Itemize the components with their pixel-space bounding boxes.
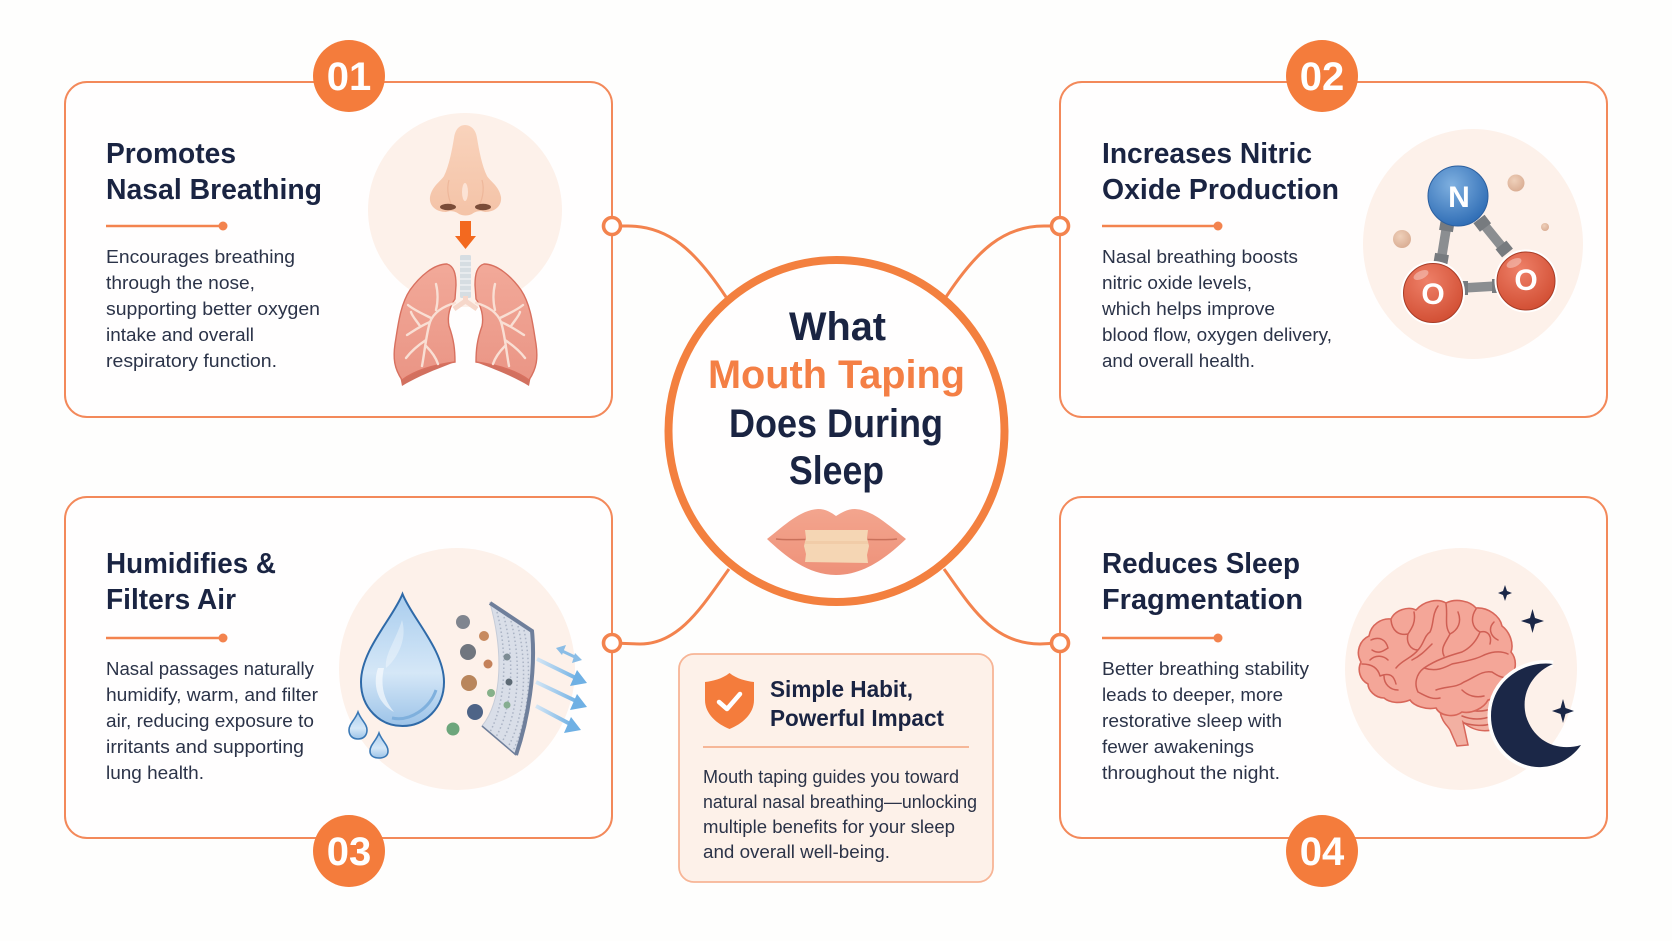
nose bbox=[430, 125, 501, 216]
callout: simple habit, powerful impact bbox=[679, 654, 993, 882]
heading bbox=[106, 548, 276, 616]
callout heading bbox=[770, 676, 944, 731]
atom O right: O bbox=[1514, 264, 1538, 297]
arrow down bbox=[455, 221, 476, 249]
particles bbox=[446, 615, 495, 736]
body text: blood flow, oxygen delivery, bbox=[1102, 324, 1332, 345]
body text: throughout the night. bbox=[1102, 762, 1280, 783]
body text: through the nose, bbox=[106, 272, 255, 293]
body text: fewer awakenings bbox=[1102, 736, 1254, 757]
title: Sleep bbox=[789, 449, 884, 493]
lungs bbox=[394, 264, 537, 386]
icon: molecule bbox=[1363, 129, 1583, 359]
divider bbox=[1102, 634, 1222, 642]
badge 04: 04 bbox=[1300, 830, 1345, 874]
airflow arrows bbox=[536, 645, 587, 733]
body text: Encourages breathing bbox=[106, 246, 295, 267]
callout body: natural nasal breathing—unlocking bbox=[703, 792, 977, 812]
badge 03: 03 bbox=[327, 830, 371, 874]
heading: Increases Nitric bbox=[1102, 138, 1312, 170]
heading bbox=[1102, 138, 1339, 206]
heading bbox=[106, 138, 322, 206]
badge 01: 01 bbox=[327, 55, 371, 99]
atom N: N bbox=[1448, 181, 1470, 214]
body text bbox=[106, 658, 318, 783]
icon: water drop and air filter bbox=[339, 548, 587, 790]
tape bbox=[804, 530, 869, 563]
body text: and overall health. bbox=[1102, 350, 1255, 371]
heading: Reduces Sleep bbox=[1102, 548, 1300, 580]
heading: Fragmentation bbox=[1102, 584, 1303, 616]
icon: taped lips bbox=[767, 509, 906, 575]
badge 02: 02 bbox=[1300, 55, 1344, 99]
heading: Humidifies & bbox=[106, 548, 276, 580]
filter mesh bbox=[482, 603, 533, 755]
panel: 03 humidifies and filters bbox=[65, 497, 612, 887]
callout body: multiple benefits for your sleep bbox=[703, 817, 955, 837]
heading: Promotes bbox=[106, 138, 236, 170]
body text: irritants and supporting bbox=[106, 736, 304, 757]
heading: Nasal Breathing bbox=[106, 174, 322, 206]
panel: 02 nitric oxide bbox=[1060, 40, 1607, 417]
title: What bbox=[789, 305, 886, 349]
body text bbox=[106, 246, 320, 371]
callout heading: Powerful Impact bbox=[770, 705, 944, 731]
crescent moon bbox=[1491, 663, 1581, 767]
badge 04 bbox=[1286, 815, 1358, 887]
panel: 01 promotes nasal breathing bbox=[65, 40, 612, 417]
callout body: and overall well-being. bbox=[703, 842, 890, 862]
panel: 04 reduces sleep fragmentation bbox=[1060, 497, 1607, 887]
connector lines bbox=[612, 226, 1060, 644]
body text bbox=[1102, 658, 1310, 783]
callout body bbox=[703, 767, 977, 862]
badge 01 bbox=[313, 40, 385, 112]
callout heading: Simple Habit, bbox=[770, 676, 913, 702]
stars bbox=[1498, 585, 1574, 723]
callout body: Mouth taping guides you toward bbox=[703, 767, 959, 787]
connector node dots bbox=[604, 218, 1068, 652]
icon: nose and lungs bbox=[368, 113, 562, 386]
moon halo bbox=[1491, 663, 1581, 767]
water drops bbox=[349, 594, 444, 758]
brain bbox=[1358, 601, 1515, 746]
body text: restorative sleep with bbox=[1102, 710, 1282, 731]
badge 03 bbox=[313, 815, 385, 887]
body text: air, reducing exposure to bbox=[106, 710, 314, 731]
divider bbox=[106, 634, 228, 642]
body text: lung health. bbox=[106, 762, 204, 783]
title: Does During bbox=[729, 402, 943, 446]
icon: shield check bbox=[705, 673, 754, 729]
body text bbox=[1101, 246, 1332, 371]
badge 02 bbox=[1286, 40, 1358, 112]
atom O left bbox=[1401, 261, 1465, 325]
atom O left: O bbox=[1421, 278, 1445, 311]
body text: humidify, warm, and filter bbox=[106, 684, 318, 705]
heading: Oxide Production bbox=[1102, 174, 1339, 206]
trachea bbox=[460, 255, 471, 298]
title bbox=[708, 305, 965, 493]
heading: Filters Air bbox=[106, 584, 236, 616]
body text: nitric oxide levels, bbox=[1102, 272, 1252, 293]
bonds bbox=[1440, 219, 1508, 288]
title: Mouth Taping bbox=[708, 353, 965, 397]
body text: leads to deeper, more bbox=[1102, 684, 1283, 705]
body text: Nasal passages naturally bbox=[106, 658, 315, 679]
atom N bbox=[1428, 166, 1488, 226]
divider bbox=[1102, 222, 1222, 230]
atom O right bbox=[1494, 250, 1558, 312]
body text: Nasal breathing boosts bbox=[1102, 246, 1298, 267]
body text: supporting better oxygen bbox=[106, 298, 320, 319]
heading bbox=[1102, 548, 1303, 616]
icon: brain and moon bbox=[1345, 548, 1581, 790]
central circle bbox=[668, 260, 1004, 602]
divider bbox=[106, 222, 228, 230]
body text: intake and overall bbox=[106, 324, 254, 345]
body text: which helps improve bbox=[1101, 298, 1275, 319]
body text: respiratory function. bbox=[106, 350, 277, 371]
body text: Better breathing stability bbox=[1102, 658, 1310, 679]
